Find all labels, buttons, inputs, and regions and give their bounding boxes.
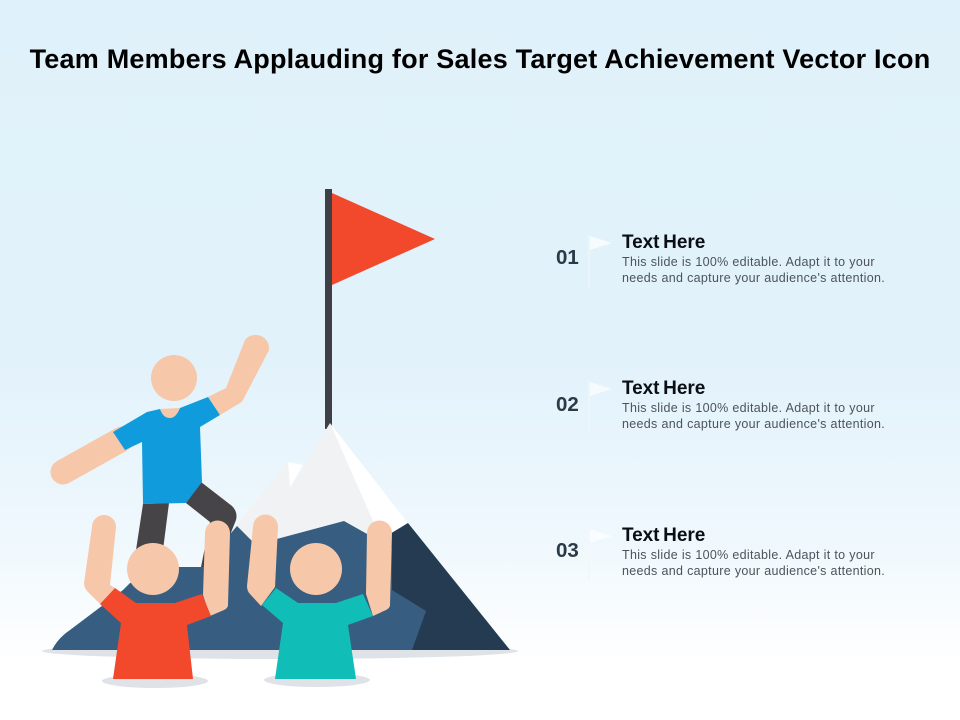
- item 01 text: [622, 255, 885, 285]
- foot shadow: [264, 673, 370, 687]
- item 03 number: 03: [556, 539, 579, 562]
- foot shadow: [102, 674, 208, 688]
- item 01 text: This slide is 100% editable. Adapt it to your: [622, 255, 875, 269]
- item 02 heading: Text Here: [622, 378, 705, 399]
- ground shadow: [42, 643, 518, 659]
- teal shirt person: [247, 514, 392, 687]
- icon: white flag 03: [588, 528, 612, 580]
- item 02 text: This slide is 100% editable. Adapt it to your: [622, 401, 875, 415]
- mountain: [52, 423, 510, 650]
- red shirt person: [84, 515, 230, 688]
- item 03 text: This slide is 100% editable. Adapt it to your: [622, 548, 875, 562]
- item 01 number: 01: [556, 246, 579, 269]
- item 02 text: needs and capture your audience's attention.: [622, 417, 885, 431]
- red flag: [332, 193, 435, 285]
- title: Team Members Applauding for Sales Target Achievement Vector Icon: [30, 44, 930, 74]
- climbing man: [63, 335, 269, 567]
- item 03 heading: Text Here: [622, 525, 705, 546]
- item 02 text: [622, 401, 885, 431]
- icon: white flag 02: [588, 381, 612, 433]
- item 03 text: needs and capture your audience's attention.: [622, 564, 885, 578]
- item 03 text: [622, 548, 885, 578]
- flag pole: [325, 189, 332, 429]
- item 02 number: 02: [556, 393, 579, 416]
- icon: white flag 01: [588, 235, 612, 287]
- item 01 heading: Text Here: [622, 232, 705, 253]
- item 01 text: needs and capture your audience's attention.: [622, 271, 885, 285]
